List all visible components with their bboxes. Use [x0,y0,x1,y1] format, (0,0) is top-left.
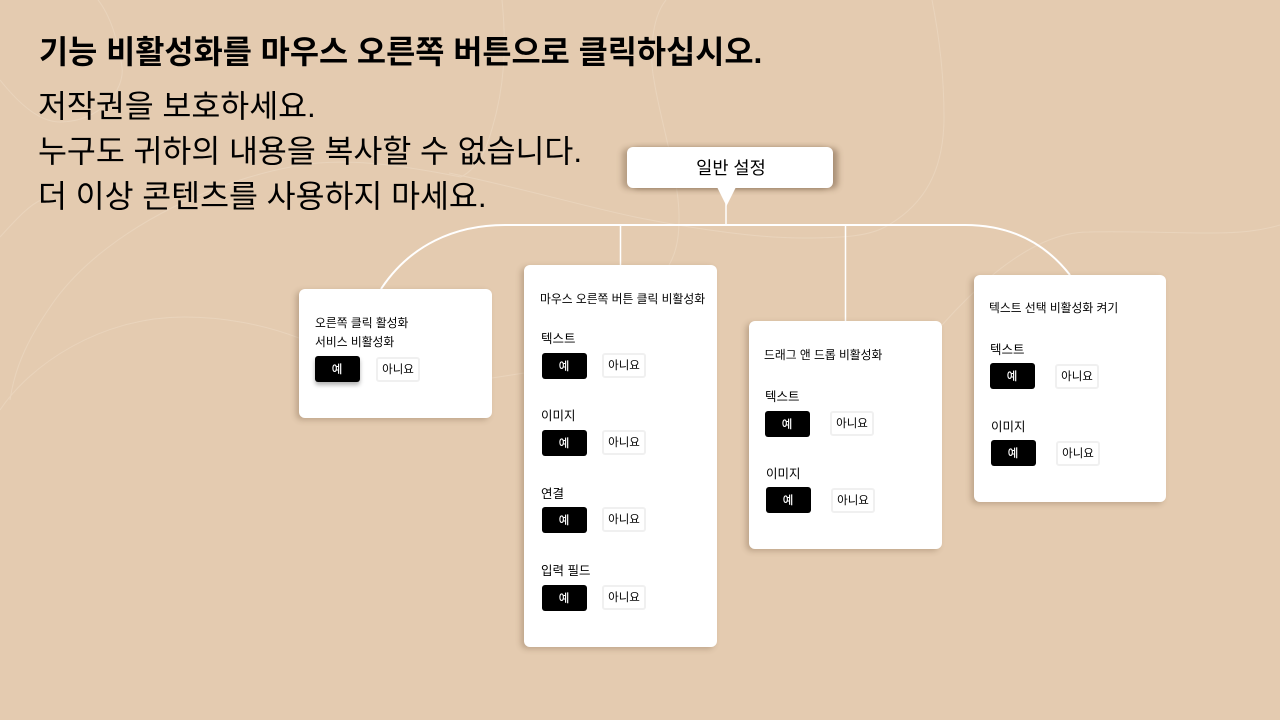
intro text: 누구도 귀하의 내용을 복사할 수 없습니다. [38,134,582,169]
panel: right click: 서비스 비활성화 [315,335,394,349]
intro text: 더 이상 콘텐츠를 사용하지 마세요. [38,179,487,214]
panel: mouse right button: 예 [559,515,569,527]
title: 기능 비활성화를 마우스 오른쪽 버튼으로 클릭하십시오. [39,34,762,70]
panel: drag and drop [749,321,942,549]
panel: right click: 오른쪽 클릭 활성화 [315,316,408,330]
panel: right click: 아니요 [382,364,414,376]
intro text [38,89,582,214]
panel: drag and drop: 아니요 [836,418,868,430]
panel: right click: 예 [332,364,342,376]
intro text: 저작권을 보호하세요. [38,89,316,124]
panel: drag and drop: 아니요 [837,495,869,507]
panel: text selection: 텍스트 선택 비활성화 켜기 [989,301,1118,315]
panel: text selection: 아니요 [1061,371,1093,383]
panel: drag and drop: 이미지 [766,467,801,481]
panel: mouse right button: 예 [559,438,569,450]
panel: mouse right button: 입력 필드 [541,564,590,578]
panel: mouse right button: 예 [559,593,569,605]
panel: text selection: 텍스트 [990,343,1025,357]
panel: mouse right button: 마우스 오른쪽 버튼 클릭 비활성화 [540,292,705,306]
panel: text selection: 이미지 [991,420,1026,434]
panel: mouse right button: 이미지 [541,409,576,423]
callout: general settings: 일반 설정 [696,158,766,178]
panel: mouse right button: 텍스트 [541,332,576,346]
panel: mouse right button [524,265,717,647]
panel: text selection [974,275,1166,502]
panel: mouse right button: 아니요 [608,360,640,372]
panel: drag and drop: 예 [783,495,793,507]
panel: mouse right button: 아니요 [608,437,640,449]
panel: mouse right button: 아니요 [608,592,640,604]
panel: drag and drop: 드래그 앤 드롭 비활성화 [764,348,882,362]
panel: text selection: 아니요 [1062,448,1094,460]
panel: mouse right button: 아니요 [608,514,640,526]
panel: mouse right button: 연결 [541,487,564,501]
panel: drag and drop: 텍스트 [765,390,800,404]
panel: right click [299,289,492,418]
callout: general settings [620,144,841,206]
panel: drag and drop: 예 [782,419,792,431]
panel: text selection: 예 [1008,448,1018,460]
panel: mouse right button: 예 [559,361,569,373]
panel: text selection: 예 [1007,371,1017,383]
